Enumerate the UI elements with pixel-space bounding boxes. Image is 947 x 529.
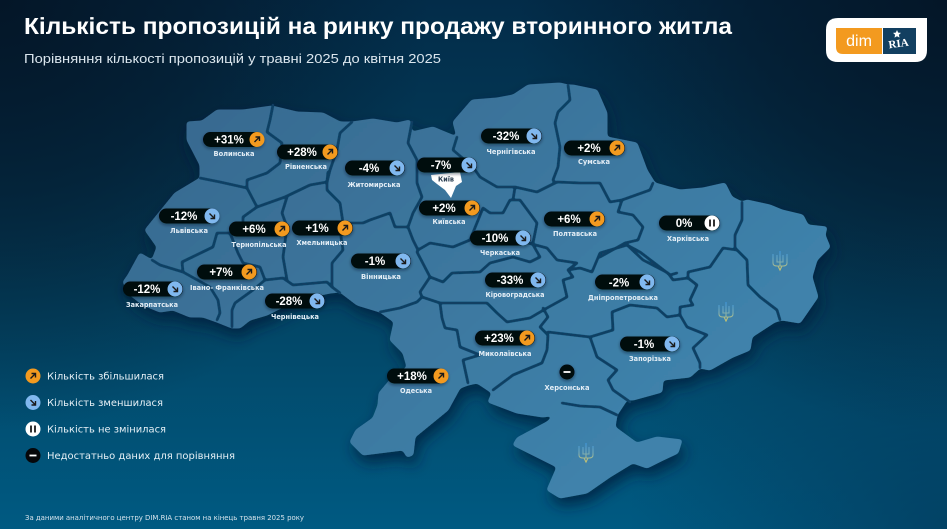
Zakarpattia: -12% <box>134 284 160 296</box>
Chernivtsi: -28% <box>276 296 302 308</box>
Zakarpattia <box>123 282 183 309</box>
Kyiv oblast: +2% <box>432 203 456 215</box>
trident: Crimea <box>579 443 593 462</box>
Ivano-Frankivsk: +7% <box>209 267 233 279</box>
Khmelnytskyi: Хмельницька <box>296 239 348 247</box>
oblast borders <box>152 85 780 415</box>
Volyn <box>203 132 264 158</box>
trident: Donetsk <box>719 302 733 321</box>
Rivne <box>277 144 338 171</box>
logo: dim.ria: RIA <box>888 37 909 51</box>
Cherkasy: Черкаська <box>480 249 520 257</box>
Lviv <box>159 208 220 235</box>
Vinnytsia: Вінницька <box>361 273 401 281</box>
Kharkiv: Харківська <box>667 235 709 243</box>
Ivano-Frankivsk: Івано- Франківська <box>190 284 264 292</box>
Dnipropetrovsk: Дніпропетровська <box>588 294 658 302</box>
legend: no data: Недостатньо даних для порівняння <box>47 450 235 462</box>
Ternopil: +6% <box>242 224 266 236</box>
Kyiv city shape <box>431 172 462 198</box>
Kyiv city <box>417 158 477 184</box>
Cherkasy <box>470 230 531 257</box>
Khmelnytskyi <box>292 220 353 247</box>
Mykolaiv: Миколаївська <box>478 350 532 358</box>
Dnipropetrovsk: -2% <box>609 278 629 290</box>
Rivne: Рівненська <box>285 163 327 171</box>
Odesa <box>387 368 448 395</box>
Poltava: +6% <box>557 214 581 226</box>
map of Ukraine <box>123 83 830 498</box>
title: Кількість пропозицій на ринку продажу вторинного житла <box>24 13 732 39</box>
Cherkasy: -10% <box>482 233 508 245</box>
Vinnytsia <box>351 254 411 281</box>
Chernivtsi <box>265 294 325 321</box>
Mykolaiv <box>475 330 535 358</box>
subtitle: Порівняння кількості пропозицій у травні 2025 до квітня 2025 <box>24 51 441 66</box>
Khmelnytskyi: +1% <box>305 223 329 235</box>
Sumy: Сумська <box>578 158 610 166</box>
Vinnytsia: -1% <box>365 256 385 268</box>
map silhouette <box>123 83 830 498</box>
Kirovohrad <box>485 272 546 299</box>
Odesa: Одеська <box>400 387 432 395</box>
Kirovohrad: Кіровоградська <box>486 291 545 299</box>
Chernivtsi: Чернівецька <box>271 313 319 321</box>
Kyiv oblast <box>419 200 480 226</box>
Zaporizhzhia <box>620 336 680 363</box>
Lviv: Львівська <box>170 227 208 235</box>
legend <box>26 368 235 463</box>
Chernihiv: Чернігівська <box>486 148 536 156</box>
Zakarpattia: Закарпатська <box>126 301 178 309</box>
Kyiv city: Київ <box>438 176 455 184</box>
Kirovohrad: -33% <box>497 275 523 287</box>
Chernihiv: -32% <box>493 131 519 143</box>
Kyiv oblast: Київська <box>432 218 466 226</box>
legend: decreased: Кількість зменшилася <box>47 397 163 409</box>
legend: unchanged: Кількість не змінилася <box>47 424 166 436</box>
Volyn: +31% <box>214 134 244 146</box>
source note: За даними аналітичного центру DIM.RIA станом на кінець травня 2025 року <box>25 514 304 522</box>
Kharkiv: 0% <box>676 218 692 230</box>
Rivne: +28% <box>287 147 317 159</box>
Poltava <box>544 212 605 238</box>
Kherson: Херсонська <box>544 384 590 392</box>
Mykolaiv: +23% <box>484 333 514 345</box>
Zaporizhzhia: -1% <box>634 339 654 351</box>
Zaporizhzhia: Запорізька <box>629 355 671 363</box>
Volyn: Волинська <box>214 150 255 158</box>
Kharkiv <box>659 216 720 243</box>
Chernihiv <box>481 128 542 156</box>
Kyiv city: -7% <box>431 160 451 172</box>
Sumy <box>564 140 625 166</box>
legend: decreased <box>26 395 163 410</box>
legend: unchanged <box>26 422 166 436</box>
Kherson <box>544 364 590 392</box>
Ternopil <box>229 222 290 249</box>
Lviv: -12% <box>171 211 197 223</box>
legend: increased: Кількість збільшилася <box>47 370 164 382</box>
Odesa: +18% <box>397 371 427 383</box>
trident: Luhansk <box>773 251 787 270</box>
legend: increased <box>26 368 164 384</box>
Ternopil: Тернопільська <box>232 241 287 249</box>
logo: dim.ria <box>826 18 927 62</box>
Zhytomyr <box>345 160 405 189</box>
Zhytomyr: -4% <box>359 163 379 175</box>
Ivano-Frankivsk <box>190 264 264 292</box>
Zhytomyr: Житомирська <box>348 181 401 189</box>
legend: no data <box>26 448 235 463</box>
Poltava: Полтавська <box>553 230 597 238</box>
Dnipropetrovsk <box>588 274 658 302</box>
logo: dim.ria: dim <box>846 33 872 50</box>
Sumy: +2% <box>577 143 601 155</box>
